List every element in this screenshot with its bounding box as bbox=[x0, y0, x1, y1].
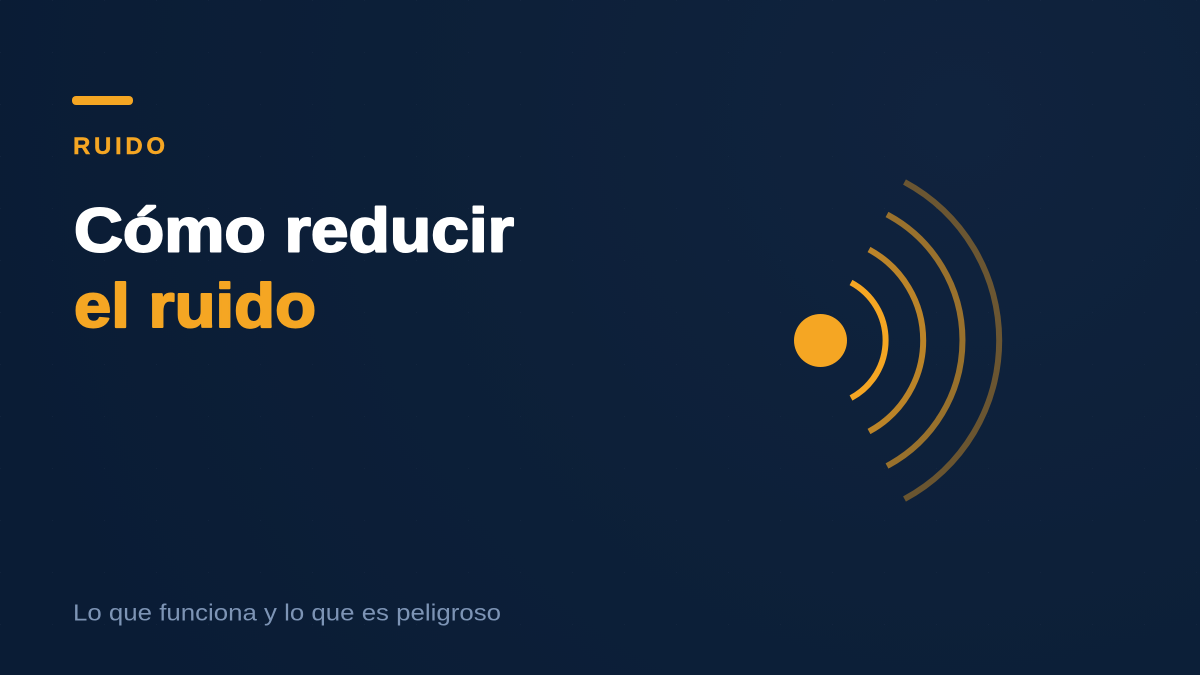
title bbox=[74, 196, 514, 341]
icon: sound waves bbox=[794, 182, 999, 499]
subtitle: Lo que funciona y lo que es peligroso bbox=[73, 600, 501, 626]
title line 2: el ruido bbox=[74, 272, 316, 341]
wave 4 bbox=[904, 182, 999, 499]
eyebrow label: RUIDO bbox=[73, 133, 165, 160]
wave 3 bbox=[887, 214, 962, 466]
title line 1: Cómo reducir bbox=[74, 196, 514, 266]
accent bar bbox=[72, 96, 133, 105]
sound source dot bbox=[794, 314, 847, 367]
wave 2 bbox=[869, 250, 923, 432]
wave 1 bbox=[851, 282, 886, 398]
